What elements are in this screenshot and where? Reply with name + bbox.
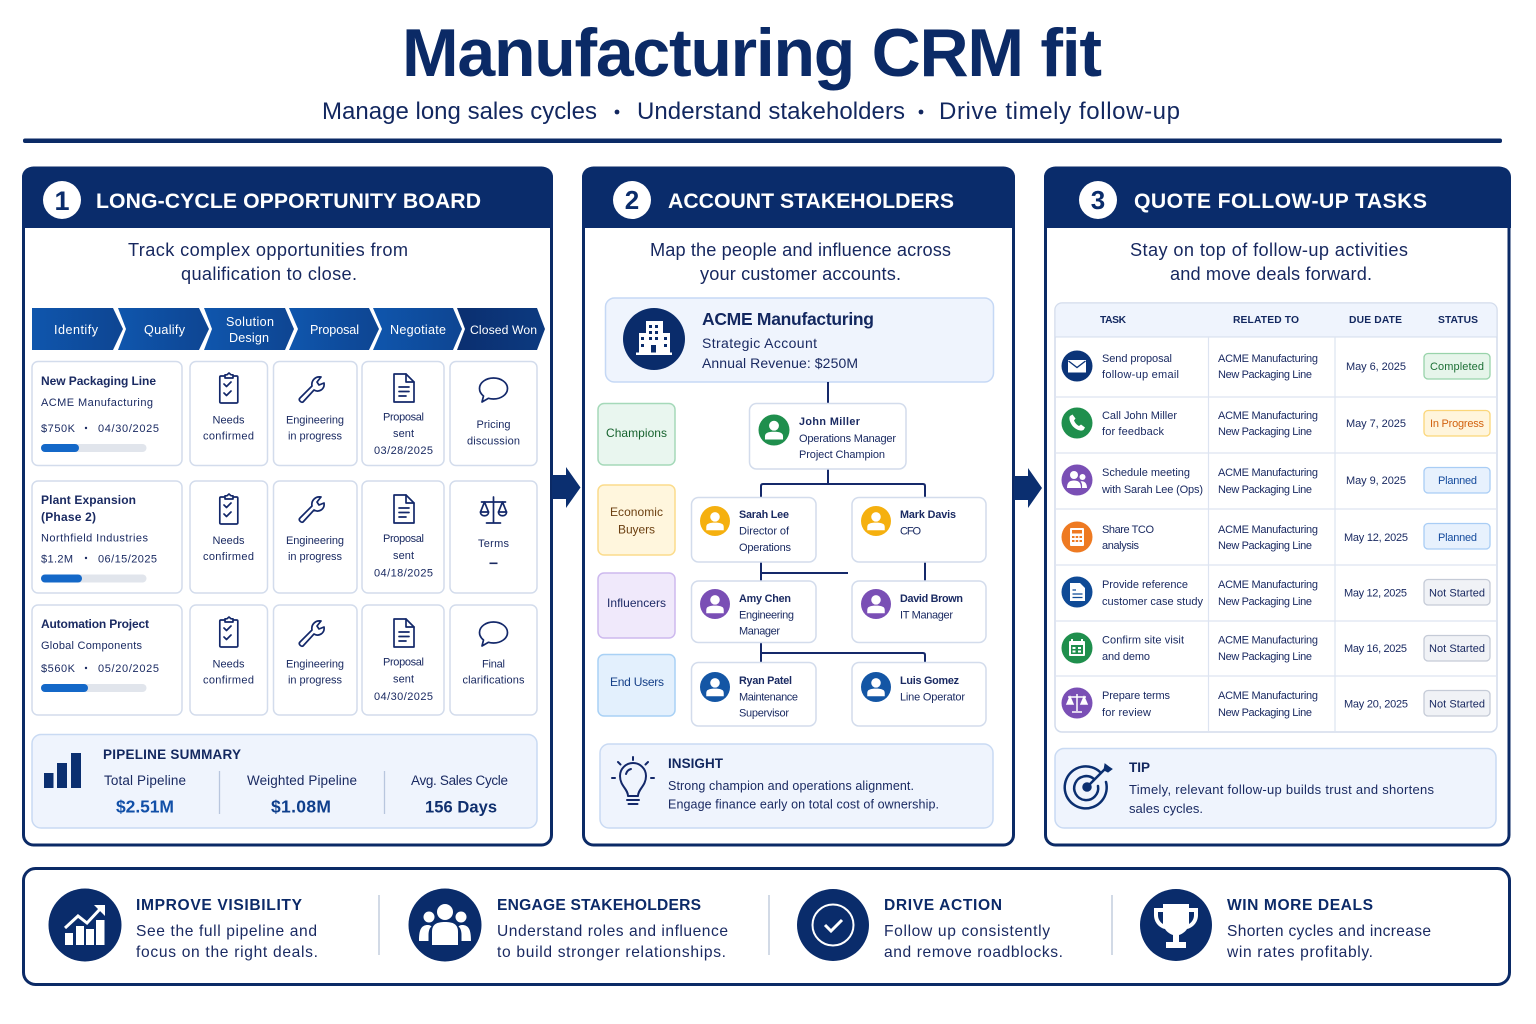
benefit: engage stakeholders: Understand roles and influence <box>497 923 728 940</box>
task row: call John Miller <box>1062 408 1490 438</box>
stakeholder: Sarah Lee <box>692 498 816 562</box>
opportunity row 1: discussion <box>467 436 520 448</box>
task row: provide reference: May 12, 2025 <box>1344 588 1407 600</box>
opportunity row 2: Plant Expansion <box>41 493 136 507</box>
subtitle <box>322 98 1180 125</box>
task row: prepare terms: ACME Manufacturing <box>1218 690 1318 702</box>
stakeholder: Amy Chen: Engineering <box>739 610 794 622</box>
panel 2 description <box>650 240 951 284</box>
opportunity row 3: clarifications <box>462 674 525 686</box>
opportunity row 3: in progress <box>288 674 342 686</box>
stakeholder: David Brown: David Brown <box>900 593 963 605</box>
opportunity row 2: Engineering <box>286 535 344 547</box>
table header <box>1055 303 1497 337</box>
role label: end users <box>598 654 675 716</box>
stakeholder: Luis Gomez: Luis Gomez <box>900 675 960 687</box>
opportunity row 3: Global Components <box>41 640 142 652</box>
stakeholder: Sarah Lee: Director of <box>739 526 790 538</box>
opportunity row 1: in progress <box>288 430 342 442</box>
org chart connectors <box>761 382 925 662</box>
opportunity row 1: $750K <box>41 423 76 435</box>
panel header 1 <box>22 167 553 228</box>
task row: send proposal: May 6, 2025 <box>1346 361 1406 373</box>
task row: provide reference: New Packaging Line <box>1218 596 1312 608</box>
benefit: drive action: DRIVE ACTION <box>884 897 1002 914</box>
panel header 3: 3 <box>1091 185 1105 215</box>
pipeline summary <box>32 734 537 828</box>
opportunity row 1: sent <box>393 428 414 440</box>
stakeholder: Amy Chen: Manager <box>739 626 780 638</box>
icon: bar chart <box>44 753 81 788</box>
stage chevrons: Qualify <box>144 323 186 337</box>
account card: Annual Revenue: $250M <box>702 355 858 371</box>
benefit: win more deals: WIN MORE DEALS <box>1227 897 1373 914</box>
stakeholder: Sarah Lee: Sarah Lee <box>739 509 789 521</box>
stage chevrons: Negotiate <box>390 323 446 337</box>
task row: prepare terms: May 20, 2025 <box>1344 698 1408 710</box>
stakeholder: Amy Chen <box>692 581 816 642</box>
stakeholder: Ryan Patel: Ryan Patel <box>739 675 792 687</box>
opportunity row 3: Final <box>482 658 505 670</box>
task row: schedule meeting: New Packaging Line <box>1218 484 1312 496</box>
panel header 3 <box>1044 167 1511 228</box>
benefit: engage stakeholders: ENGAGE STAKEHOLDERS <box>497 897 701 914</box>
stage chevrons: Proposal <box>310 323 359 337</box>
opportunity row 3: Proposal <box>383 656 424 668</box>
panel 3 description: Stay on top of follow-up activities <box>1130 240 1408 260</box>
opportunity row 1: confirmed <box>203 430 254 442</box>
benefit: improve visibility <box>48 888 318 962</box>
opportunity row 3 <box>32 605 537 715</box>
task row: call John Miller: In Progress <box>1430 418 1484 430</box>
opportunity row 3: sent <box>393 674 414 686</box>
task row: schedule meeting: May 9, 2025 <box>1346 475 1406 487</box>
table header: RELATED TO <box>1233 315 1299 326</box>
benefit: improve visibility: See the full pipeline and <box>136 923 317 940</box>
opportunity row 2: $1.2M <box>41 554 73 566</box>
stage chevrons: Identify <box>54 323 99 337</box>
task row: send proposal: follow-up email <box>1102 369 1179 381</box>
stakeholder: Ryan Patel <box>692 662 816 726</box>
tip callout: sales cycles. <box>1129 801 1203 816</box>
stakeholder: Mark Davis <box>852 498 986 562</box>
benefit: drive action: and remove roadblocks. <box>884 944 1063 961</box>
subtitle: Understand stakeholders <box>637 98 905 125</box>
panel: long-cycle opportunity board <box>22 167 553 845</box>
opportunity row 1: 03/28/2025 <box>374 445 433 457</box>
pipeline summary: PIPELINE SUMMARY <box>103 747 241 762</box>
task row: send proposal: New Packaging Line <box>1218 369 1312 381</box>
stage chevrons <box>32 308 545 350</box>
pipeline summary: Total Pipeline <box>104 773 186 788</box>
task table <box>1055 303 1497 732</box>
benefit: win more deals <box>1140 889 1431 961</box>
task row: send proposal: Send proposal <box>1102 353 1172 365</box>
opportunity row 1 <box>32 362 537 466</box>
insight callout: INSIGHT <box>668 756 724 771</box>
benefit: engage stakeholders <box>408 888 728 962</box>
stakeholder: David Brown: IT Manager <box>900 610 953 622</box>
task row: confirm site visit: Confirm site visit <box>1102 634 1184 646</box>
task row: confirm site visit: May 16, 2025 <box>1344 643 1407 655</box>
task row: prepare terms: New Packaging Line <box>1218 707 1312 719</box>
stage chevrons: Design <box>229 331 269 345</box>
benefit: improve visibility: focus on the right deals. <box>136 944 318 961</box>
benefits strip <box>24 868 1510 984</box>
panel header 1: LONG-CYCLE OPPORTUNITY BOARD <box>96 190 481 213</box>
table header: STATUS <box>1438 315 1478 326</box>
account card: Strategic Account <box>702 335 817 351</box>
role label: champions <box>598 404 675 465</box>
insight callout: Strong champion and operations alignment. <box>668 779 914 793</box>
panel 2 description: Map the people and influence across <box>650 240 951 260</box>
panel header 2 <box>582 167 1015 228</box>
panel 1 description <box>128 240 408 284</box>
task row: call John Miller: for feedback <box>1102 426 1164 438</box>
stakeholder: John Miller: John Miller <box>799 416 861 428</box>
opportunity row 1: ACME Manufacturing <box>41 397 153 409</box>
opportunity row 3: Engineering <box>286 658 344 670</box>
task row: provide reference: customer case study <box>1102 596 1204 608</box>
opportunity row 2: Terms <box>478 538 510 550</box>
stakeholder: John Miller: Operations Manager <box>799 433 896 445</box>
icon: target <box>1065 764 1112 808</box>
task row: confirm site visit: Not Started <box>1429 643 1485 655</box>
stakeholder: Mark Davis: Mark Davis <box>900 509 956 521</box>
task row: schedule meeting: with Sarah Lee (Ops) <box>1101 484 1203 496</box>
benefit: drive action: Follow up consistently <box>884 923 1050 940</box>
task row: call John Miller: New Packaging Line <box>1218 426 1312 438</box>
title: Manufacturing CRM fit <box>402 15 1102 91</box>
task row: prepare terms: Not Started <box>1429 698 1485 710</box>
panel: account stakeholders <box>582 167 1015 845</box>
opportunity row 2: Needs <box>212 535 245 547</box>
tip callout: Timely, relevant follow-up builds trust and shortens <box>1129 782 1434 797</box>
role label: end users: End Users <box>610 675 664 689</box>
panel 3 description <box>1130 240 1408 284</box>
task row: provide reference: ACME Manufacturing <box>1218 579 1318 591</box>
subtitle: Drive timely follow-up <box>939 98 1180 125</box>
arrow: board to stakeholders <box>552 467 580 508</box>
stakeholder: Mark Davis: CFO <box>900 526 921 538</box>
task row: provide reference: Provide reference <box>1102 579 1188 591</box>
opportunity row 2: sent <box>393 550 414 562</box>
task row: prepare terms: Prepare terms <box>1102 690 1170 702</box>
opportunity row 2: (Phase 2) <box>41 510 96 524</box>
task row: schedule meeting <box>1062 464 1490 496</box>
opportunity row 2: Proposal <box>383 533 424 545</box>
benefit: engage stakeholders: to build stronger relationships. <box>497 944 726 961</box>
task row: send proposal <box>1062 350 1490 382</box>
stakeholder: John Miller <box>750 404 906 469</box>
opportunity row 2: 04/18/2025 <box>374 568 433 580</box>
insight callout <box>600 744 993 828</box>
stakeholder: Luis Gomez: Line Operator <box>900 692 965 704</box>
opportunity row 1: Needs <box>212 414 245 426</box>
stakeholder: John Miller: Project Champion <box>799 449 885 461</box>
panel 3 description: and move deals forward. <box>1170 264 1372 284</box>
tip callout <box>1055 748 1496 828</box>
panel header 3: QUOTE FOLLOW-UP TASKS <box>1134 190 1427 213</box>
benefit: drive action <box>797 889 1063 961</box>
opportunity row 3: 04/30/2025 <box>374 691 433 703</box>
task row: share TCO: New Packaging Line <box>1218 540 1312 552</box>
arrow: stakeholders to tasks <box>1014 468 1042 508</box>
icon: building <box>623 308 685 370</box>
task row: confirm site visit <box>1062 632 1490 664</box>
role label: influencers: Influencers <box>607 596 666 610</box>
opportunity row 1: 04/30/2025 <box>98 423 159 435</box>
tip callout: TIP <box>1129 760 1150 775</box>
insight callout: Engage finance early on total cost of ownership. <box>668 798 939 812</box>
panel header 2: 2 <box>625 185 639 215</box>
task row: schedule meeting: ACME Manufacturing <box>1218 467 1318 479</box>
stage chevrons: Closed Won <box>470 323 537 337</box>
stage chevrons: Solution <box>226 315 274 329</box>
benefit: win more deals: win rates profitably. <box>1226 944 1373 961</box>
opportunity row 1: New Packaging Line <box>41 374 156 388</box>
panel header 1: 1 <box>54 186 70 216</box>
task row: share TCO: May 12, 2025 <box>1344 532 1408 544</box>
opportunity row 2: Northfield Industries <box>41 532 148 544</box>
panel header 2: ACCOUNT STAKEHOLDERS <box>668 190 954 213</box>
stakeholder: Sarah Lee: Operations <box>739 542 792 554</box>
role label: economic buyers: Buyers <box>618 522 655 536</box>
stakeholder: Ryan Patel: Maintenance <box>739 692 798 704</box>
panel 1 description: qualification to close. <box>181 264 357 284</box>
stakeholder: Luis Gomez <box>852 662 986 726</box>
task row: provide reference: Not Started <box>1429 588 1485 600</box>
task row: call John Miller: ACME Manufacturing <box>1218 410 1318 422</box>
task row: send proposal: ACME Manufacturing <box>1218 353 1318 365</box>
role label: influencers <box>598 573 675 638</box>
opportunity row 3: confirmed <box>203 674 254 686</box>
icon: light bulb <box>612 757 654 804</box>
task row: share TCO: ACME Manufacturing <box>1218 524 1318 536</box>
pipeline summary: Weighted Pipeline <box>247 773 357 788</box>
opportunity row 1: Engineering <box>286 414 344 426</box>
stakeholder: Ryan Patel: Supervisor <box>739 708 789 720</box>
opportunity row 1: Pricing <box>476 419 510 431</box>
panel 2 description: your customer accounts. <box>700 264 901 284</box>
opportunity row 3: $560K <box>41 663 76 675</box>
stakeholder: Amy Chen: Amy Chen <box>739 593 791 605</box>
task row: call John Miller: May 7, 2025 <box>1346 418 1406 430</box>
task row: schedule meeting: Schedule meeting <box>1102 467 1190 479</box>
opportunity row 2: in progress <box>288 551 342 563</box>
opportunity row 2 <box>32 481 537 593</box>
pipeline summary: $1.08M <box>271 796 331 816</box>
account card <box>606 298 994 382</box>
task row: share TCO: Share TCO <box>1102 524 1154 536</box>
account card: ACME Manufacturing <box>702 309 874 329</box>
task row: confirm site visit: ACME Manufacturing <box>1218 634 1318 646</box>
table header: TASK <box>1100 315 1127 326</box>
task row: call John Miller: Call John Miller <box>1102 410 1177 422</box>
subtitle: Manage long sales cycles <box>322 98 597 125</box>
pipeline summary: Avg. Sales Cycle <box>411 773 508 788</box>
task row: confirm site visit: New Packaging Line <box>1218 651 1312 663</box>
panel 1 description: Track complex opportunities from <box>128 240 408 260</box>
stakeholder: David Brown <box>852 581 986 642</box>
task row: prepare terms: for review <box>1102 707 1151 719</box>
opportunity row 1: Proposal <box>383 412 424 424</box>
pipeline summary: $2.51M <box>116 796 174 816</box>
panel: quote follow-up tasks <box>1044 167 1511 845</box>
task row: provide reference <box>1062 576 1490 608</box>
task row: share TCO: analysis <box>1102 540 1140 552</box>
opportunity row 3: Needs <box>212 658 245 670</box>
task row: schedule meeting: Planned <box>1438 475 1477 487</box>
benefit: win more deals: Shorten cycles and increase <box>1227 923 1431 940</box>
opportunity row 2: 06/15/2025 <box>98 554 157 566</box>
task row: share TCO <box>1062 522 1490 552</box>
task row: share TCO: Planned <box>1438 532 1477 544</box>
task row: send proposal: Completed <box>1430 361 1484 373</box>
opportunity row 3: Automation Project <box>41 617 149 631</box>
task row: confirm site visit: and demo <box>1102 651 1150 663</box>
role label: economic buyers <box>598 485 675 555</box>
role label: economic buyers: Economic <box>610 505 663 519</box>
pipeline summary: 156 Days <box>425 798 497 816</box>
opportunity row 2: confirmed <box>203 551 254 563</box>
benefit: improve visibility: IMPROVE VISIBILITY <box>136 897 303 914</box>
table header: DUE DATE <box>1349 315 1402 326</box>
task row: prepare terms <box>1062 688 1490 719</box>
role label: champions: Champions <box>606 426 667 440</box>
opportunity row 3: 05/20/2025 <box>98 663 159 675</box>
